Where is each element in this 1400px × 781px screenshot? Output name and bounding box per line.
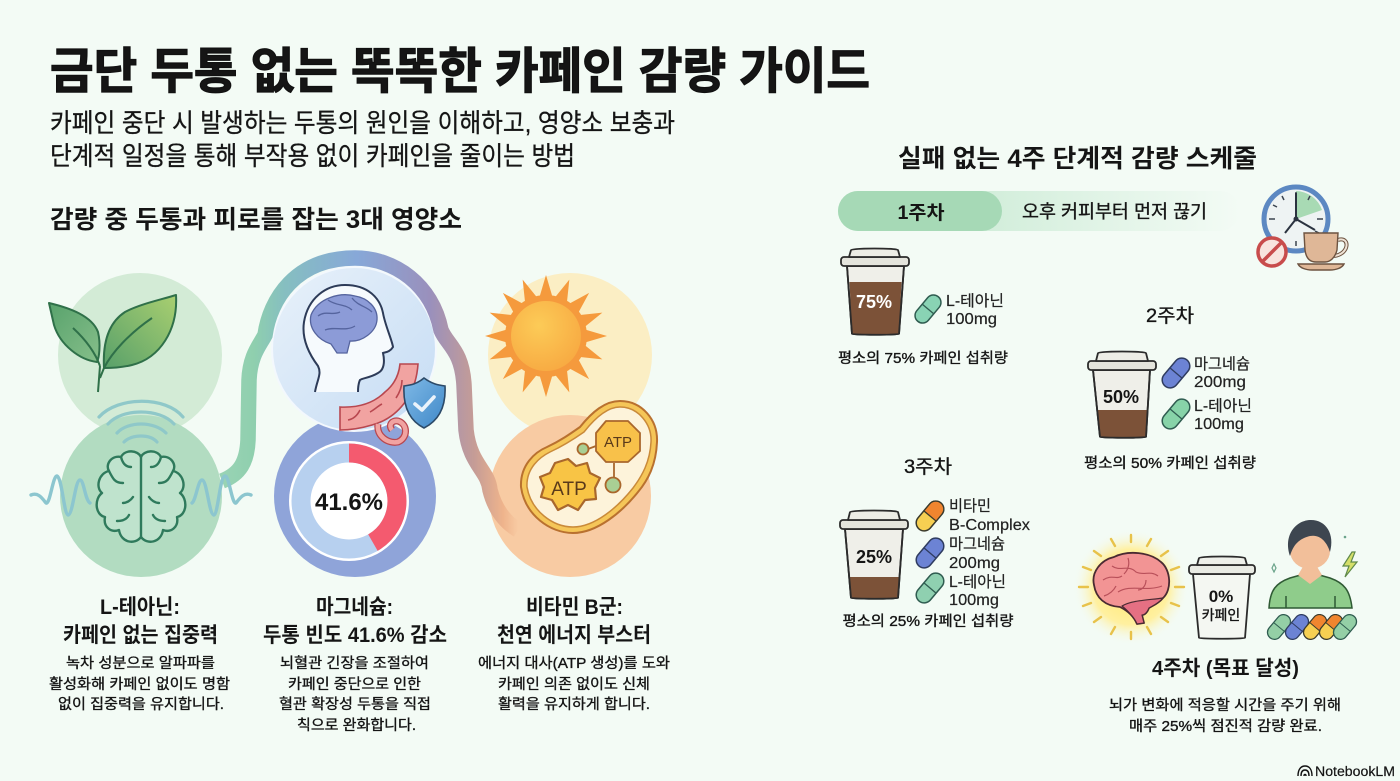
- week 3 supplement text: 100mg: [949, 592, 999, 609]
- week 4 description: 매주 25%씩 점진적 감량 완료.: [1129, 718, 1322, 735]
- icon: mitochondrion with ATP: [521, 401, 657, 533]
- week 4 heading: 4주차 (목표 달성): [1152, 657, 1299, 680]
- leaf circle: [58, 273, 222, 437]
- week 3 supplement text: B-Complex: [949, 517, 1030, 534]
- text block: vitamin B: 카페인 의존 없이도 신체: [498, 676, 650, 693]
- icon: glowing brain: [1073, 529, 1189, 645]
- schedule heading: 실패 없는 4주 단계적 감량 스케줄: [898, 145, 1257, 173]
- icon: signal arcs: [99, 401, 183, 442]
- icon: healthy person: [1269, 520, 1357, 608]
- icon: blood vessel: [340, 364, 418, 442]
- subtitle: 카페인 중단 시 발생하는 두통의 원인을 이해하고, 영양소 보충과: [50, 108, 675, 138]
- icon: mitochondrion with ATP: ATP: [604, 434, 632, 451]
- week 2 supplement text: 100mg: [1194, 416, 1244, 433]
- icon: mitochondrion with ATP: ATP: [551, 479, 587, 500]
- week 2 supplement text: [1194, 355, 1252, 433]
- donut chart 41.6%: 41.6%: [315, 489, 383, 516]
- text block: vitamin B: 에너지 대사(ATP 생성)를 도와: [478, 655, 670, 672]
- text block: magnesium: 두통 빈도 41.6% 감소: [263, 624, 447, 647]
- week 3 supplement text: L-테아닌: [949, 573, 1006, 591]
- icon: brain in head: [310, 295, 377, 353]
- icon: brain outline: [97, 451, 185, 542]
- week 1 supplement text: L-테아닌: [946, 292, 1004, 310]
- week 1 cup: [841, 248, 909, 335]
- week 2 cup: [1088, 352, 1156, 438]
- text block: L-theanine: 녹차 성분으로 알파파를: [66, 655, 215, 672]
- week 1 banner: 오후 커피부터 먼저 끊기: [1022, 201, 1207, 222]
- icon: brain waves: [31, 476, 251, 515]
- donut chart 41.6%: [289, 441, 409, 561]
- NotebookLM mark: NotebookLM: [1315, 764, 1395, 779]
- week 1 supplement text: [946, 292, 1004, 328]
- week 3 supplement text: 200mg: [949, 555, 1000, 572]
- week 2 cup: 50%: [1103, 387, 1139, 407]
- week 3 cup: 25%: [856, 547, 892, 567]
- icon: head profile: [304, 285, 393, 392]
- subtitle: [50, 108, 675, 171]
- text block: magnesium: 카페인 중단으로 인한: [288, 676, 421, 693]
- text block: magnesium: 혈관 확장성 두통을 직접: [279, 696, 431, 713]
- mitochondria circle: [489, 415, 651, 577]
- week 4 description: [1109, 697, 1341, 735]
- nutrient illustration: L-theanine: [49, 273, 222, 577]
- text block: magnesium: 뇌혈관 긴장을 조절하여: [280, 655, 429, 672]
- week 4 cup: 0%: [1209, 587, 1233, 606]
- week 3 supplement text: 마그네슘: [949, 535, 1005, 553]
- text block: L-theanine: L-테아닌:: [100, 596, 180, 619]
- week 3 heading: 3주차: [904, 456, 952, 478]
- text block: vitamin B: [478, 596, 670, 713]
- week 1 banner: 1주차: [898, 202, 945, 224]
- text block: vitamin B: 비타민 B군:: [526, 596, 623, 619]
- week 3 cup: [840, 510, 908, 599]
- donut background circle: [274, 415, 436, 577]
- week 2 capsules: [1159, 355, 1193, 432]
- icon: row of capsules: [1265, 612, 1359, 642]
- week 2 supplement text: 200mg: [1194, 374, 1246, 391]
- week 2 caption: 평소의 50% 카페인 섭취량: [1084, 455, 1256, 472]
- week 4 description: 뇌가 변화에 적응할 시간을 주기 위해: [1109, 697, 1341, 714]
- week 4 cup: [1189, 556, 1255, 639]
- text block: magnesium: 칙으로 완화합니다.: [297, 717, 416, 734]
- week 1 banner: [838, 191, 1240, 231]
- sun circle: [488, 273, 652, 437]
- text block: L-theanine: 카페인 없는 집중력: [63, 624, 218, 647]
- text block: L-theanine: 없이 집중력을 유지합니다.: [58, 696, 224, 713]
- text block: L-theanine: [49, 596, 230, 713]
- week 3 supplement text: 비타민: [949, 497, 991, 515]
- brain circle: [60, 415, 222, 577]
- week 1 capsule: [912, 292, 944, 326]
- week 2 supplement text: 마그네슘: [1194, 355, 1250, 373]
- icon: green leaves: [49, 295, 176, 392]
- connector ribbon: [222, 258, 518, 530]
- icon: sun: [483, 273, 609, 399]
- title: 금단 두통 없는 똑똑한 카페인 감량 가이드: [50, 45, 870, 99]
- subtitle: 단계적 일정을 통해 부작용 없이 카페인을 줄이는 방법: [50, 141, 575, 171]
- head circle: [272, 267, 436, 431]
- section heading: nutrients: 감량 중 두통과 피로를 잡는 3대 영양소: [50, 206, 462, 234]
- week 3 caption: 평소의 25% 카페인 섭취량: [842, 613, 1014, 630]
- icon: shield check: [404, 378, 445, 428]
- week 4 cup: 카페인: [1202, 607, 1240, 623]
- text block: vitamin B: 활력을 유지하게 합니다.: [498, 696, 650, 713]
- week 3 capsules: [913, 498, 947, 606]
- week 2 supplement text: L-테아닌: [1194, 397, 1252, 415]
- week 1 caption: 평소의 75% 카페인 섭취량: [838, 350, 1008, 367]
- text block: magnesium: 마그네슘:: [316, 596, 393, 619]
- text block: vitamin B: 천연 에너지 부스터: [497, 624, 651, 647]
- icon: clock, no-sign and cup: [1258, 187, 1347, 270]
- week 2 heading: 2주차: [1146, 305, 1194, 327]
- week 3 supplement text: [949, 497, 1030, 609]
- nutrient illustration: vitamin B: [31, 145, 1395, 779]
- week 1 cup: 75%: [856, 292, 892, 312]
- week 1 supplement text: 100mg: [946, 311, 997, 328]
- nutrient illustration: magnesium: [272, 267, 445, 577]
- text block: L-theanine: 활성화해 카페인 없이도 명함: [49, 676, 230, 693]
- text block: magnesium: [263, 596, 447, 734]
